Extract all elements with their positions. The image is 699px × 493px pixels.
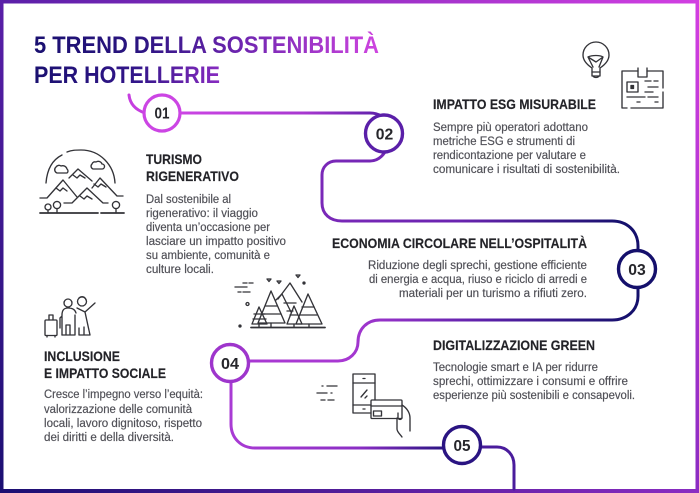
icon: id badge <box>622 68 663 108</box>
step marker 04: 04 <box>221 356 239 373</box>
icon: phone and payment card <box>317 374 410 437</box>
block: turismo rigenerativo: rigenerativo: il viaggio <box>146 208 258 220</box>
step marker 03 <box>618 250 656 288</box>
step marker 02 <box>366 115 402 152</box>
step marker 05 <box>444 426 480 464</box>
block: impatto ESG misurabile: rendicontazione per valutare e <box>433 150 586 162</box>
block: inclusione e impatto sociale: valorizzazione delle comunità <box>44 404 193 416</box>
block: impatto ESG misurabile <box>433 96 620 176</box>
block: inclusione e impatto sociale: locali, lavoro dignitoso, rispetto <box>44 418 202 430</box>
block: economia circolare <box>332 235 587 300</box>
icon: travellers with suitcase <box>45 297 95 337</box>
block: impatto ESG misurabile: IMPATTO ESG MISURABILE <box>433 96 596 112</box>
block: inclusione e impatto sociale: dei diritti e della diversità. <box>44 432 174 444</box>
icon: light bulb <box>583 42 609 78</box>
title: 5 TREND DELLA SOSTENIBILITÀ <box>34 31 379 59</box>
block: inclusione e impatto sociale <box>44 348 203 444</box>
winding path connecting the steps <box>129 95 638 489</box>
block: turismo rigenerativo: diventa un’occasione per <box>146 222 270 234</box>
block: turismo rigenerativo: RIGENERATIVO <box>146 168 239 184</box>
icon: mountains <box>40 150 124 213</box>
block: turismo rigenerativo: Dal sostenibile al <box>146 194 231 206</box>
block: digitalizzazione green: esperienze più sostenibili e consapevoli. <box>433 390 635 402</box>
icon: forest <box>235 275 325 328</box>
step marker 04 <box>212 344 248 382</box>
step marker 05: 05 <box>454 438 471 455</box>
step marker 01: 01 <box>154 106 170 122</box>
block: turismo rigenerativo: TURISMO <box>146 151 202 167</box>
block: digitalizzazione green <box>433 337 635 402</box>
title <box>34 31 379 89</box>
block: digitalizzazione green: Tecnologie smart e IA per ridurre <box>433 362 598 374</box>
block: impatto ESG misurabile: Sempre più operatori adottano <box>433 122 588 134</box>
block: digitalizzazione green: DIGITALIZZAZIONE GREEN <box>433 337 595 353</box>
block: economia circolare: materiali per un turismo a rifiuti zero. <box>399 288 587 300</box>
block: impatto ESG misurabile: comunicare i risultati di sostenibilità. <box>433 164 620 176</box>
block: inclusione e impatto sociale: INCLUSIONE <box>44 348 120 364</box>
step marker 01 <box>144 95 180 131</box>
step marker 02: 02 <box>376 126 393 144</box>
block: turismo rigenerativo <box>146 151 286 276</box>
block: economia circolare: di energia e acqua, riuso e riciclo di arredi e <box>369 274 587 286</box>
block: economia circolare: ECONOMIA CIRCOLARE NELL’OSPITALITÀ <box>332 235 587 251</box>
block: digitalizzazione green: sprechi, ottimizzare i consumi e offrire <box>433 376 628 388</box>
block: turismo rigenerativo: lasciare un impatto positivo <box>146 236 286 248</box>
block: turismo rigenerativo: culture locali. <box>146 264 214 276</box>
block: inclusione e impatto sociale: E IMPATTO SOCIALE <box>44 365 166 381</box>
block: inclusione e impatto sociale: Cresce l’impegno verso l’equità: <box>44 389 203 401</box>
block: economia circolare: Riduzione degli sprechi, gestione efficiente <box>368 260 587 272</box>
title: PER HOTELLERIE <box>34 62 220 89</box>
block: impatto ESG misurabile: metriche ESG e strumenti di <box>433 136 575 148</box>
block: turismo rigenerativo: su ambiente, comunità e <box>146 250 270 262</box>
step marker 03: 03 <box>628 262 646 279</box>
